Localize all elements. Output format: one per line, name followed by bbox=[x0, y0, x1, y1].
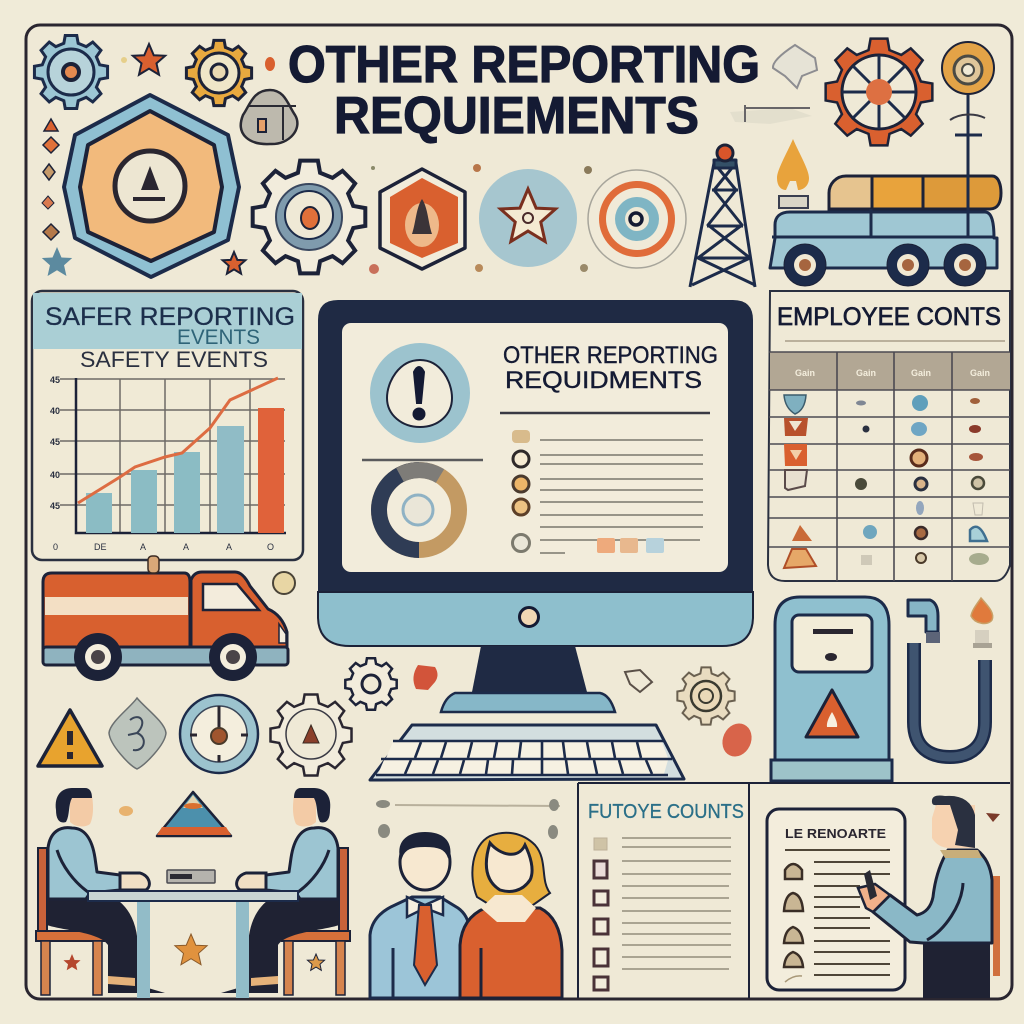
panel: safety events chart bbox=[32, 291, 303, 560]
bar chart: 45 bbox=[50, 375, 60, 385]
icon: blue tanker truck bbox=[770, 176, 1001, 286]
fuel pump bbox=[771, 597, 993, 781]
checkboxes bbox=[594, 838, 608, 990]
panel dividers bbox=[578, 783, 1010, 998]
cab bbox=[191, 572, 287, 648]
stand base bbox=[441, 693, 615, 712]
keyboard bbox=[370, 725, 684, 780]
icon: star on blue circle bbox=[479, 169, 577, 267]
chart title: SAFETY EVENTS bbox=[80, 347, 268, 372]
warning triangle bbox=[806, 690, 858, 737]
icon: yellow gear bbox=[186, 40, 252, 106]
title bbox=[288, 36, 760, 145]
icon: outline gear bbox=[270, 694, 352, 776]
monitor chin bbox=[318, 592, 753, 646]
icon: blue star bbox=[42, 247, 72, 276]
cargo box bbox=[43, 573, 190, 648]
icon: flame bbox=[777, 139, 809, 208]
bar chart: 0 bbox=[53, 542, 58, 552]
icon: blue gear bbox=[34, 35, 108, 109]
table icons bbox=[784, 395, 989, 568]
panel: employee counts table bbox=[768, 291, 1010, 581]
star bbox=[175, 934, 207, 965]
table header: Gain bbox=[911, 368, 931, 378]
cab and body bbox=[770, 212, 997, 268]
bar chart: 40 bbox=[50, 470, 60, 480]
windshield bbox=[203, 584, 259, 610]
icon: orange hexagon badge bbox=[380, 169, 465, 269]
alert icon bbox=[370, 343, 470, 443]
table grid bbox=[769, 352, 1010, 581]
connector bbox=[148, 556, 159, 573]
nozzle bbox=[908, 600, 940, 643]
pump body bbox=[775, 597, 889, 760]
icon: tan gear bbox=[677, 667, 735, 725]
screen heading: REQUIDMENTS bbox=[505, 367, 702, 394]
icon: grey badge bbox=[109, 698, 166, 769]
badge bbox=[273, 572, 295, 594]
icon: clock bbox=[180, 695, 258, 773]
bar chart: 45 bbox=[50, 501, 60, 511]
icon: padlock bbox=[241, 90, 297, 144]
screen bbox=[342, 323, 728, 572]
table title: EMPLOYEE CONTS bbox=[777, 303, 1001, 331]
icon: target bbox=[588, 170, 686, 268]
person left bbox=[36, 788, 165, 995]
bar chart bbox=[50, 375, 286, 552]
icon: pole with gauge bbox=[942, 42, 994, 238]
icon: faint shield and tool bbox=[730, 45, 817, 124]
device bbox=[167, 870, 215, 883]
chassis bbox=[43, 647, 288, 665]
donut chart bbox=[379, 470, 459, 550]
table bbox=[88, 891, 298, 998]
title: REQUIEMENTS bbox=[334, 87, 699, 145]
screen heading bbox=[503, 342, 718, 394]
table header: Gain bbox=[856, 368, 876, 378]
pump display bbox=[792, 615, 872, 672]
wheels bbox=[784, 244, 986, 286]
monitor bezel bbox=[318, 300, 753, 592]
icon: oil derrick bbox=[690, 145, 755, 287]
bar chart: 45 bbox=[50, 437, 60, 447]
heading band: SAFER REPORTING bbox=[45, 303, 295, 331]
icon: orange star bbox=[133, 44, 165, 75]
icon row: top left badges bbox=[34, 35, 297, 276]
bar chart: A bbox=[183, 542, 189, 552]
bar chart: DE bbox=[94, 542, 107, 552]
icon: sketch mark bbox=[625, 670, 652, 692]
bar chart: A bbox=[226, 542, 232, 552]
heading band: EVENTS bbox=[177, 326, 260, 349]
table header: Gain bbox=[795, 368, 815, 378]
bar chart: A bbox=[140, 542, 146, 552]
icon: floating mark bbox=[119, 806, 133, 816]
table header bbox=[770, 352, 1010, 390]
icon: orange wheel gear bbox=[826, 39, 932, 145]
table header: Gain bbox=[970, 368, 990, 378]
icon: red tag bbox=[413, 665, 438, 690]
scattered dots bbox=[121, 57, 592, 274]
panel: report document and presenter bbox=[767, 796, 1000, 998]
icon: orange drop bbox=[265, 57, 275, 71]
two employees bbox=[370, 799, 562, 998]
bar chart: O bbox=[267, 542, 274, 552]
icon: small outline gear bbox=[345, 658, 397, 710]
woman bbox=[460, 833, 562, 998]
screen heading: OTHER REPORTING bbox=[503, 342, 718, 369]
man bbox=[370, 833, 470, 998]
icon: red blob bbox=[717, 719, 757, 761]
title: OTHER REPORTING bbox=[288, 36, 760, 94]
power button bbox=[520, 608, 538, 626]
icon: warning triangle bbox=[38, 710, 102, 766]
stand bbox=[472, 646, 587, 692]
small markers bbox=[376, 799, 560, 839]
icon: small star bbox=[223, 252, 245, 274]
pump base bbox=[771, 760, 892, 781]
flame bbox=[971, 598, 993, 648]
heading band bbox=[33, 293, 302, 349]
monitor bbox=[318, 300, 753, 712]
panel: checklist bbox=[588, 801, 744, 990]
meeting scene bbox=[36, 788, 350, 998]
hose bbox=[914, 643, 985, 757]
tank bbox=[829, 176, 1001, 209]
icon row: safety symbols bbox=[38, 658, 757, 776]
small star right bbox=[307, 954, 325, 970]
report document: LE RENOARTE bbox=[785, 826, 886, 841]
icon: large hexagon badge bbox=[64, 95, 239, 277]
small star left bbox=[63, 954, 81, 970]
icon: small markers column bbox=[42, 119, 59, 240]
bar chart: 40 bbox=[50, 406, 60, 416]
headlight bbox=[279, 624, 286, 643]
report document bbox=[767, 809, 905, 990]
wheels bbox=[74, 633, 257, 681]
checklist title: FUTOYE COUNTS bbox=[588, 801, 744, 823]
person right bbox=[221, 788, 350, 995]
screen list bbox=[512, 430, 703, 553]
presenter bbox=[858, 796, 1000, 998]
icon: white gear with blue ring bbox=[253, 161, 365, 273]
red delivery truck bbox=[43, 556, 295, 681]
icon: pyramid bbox=[157, 792, 231, 836]
checklist lines bbox=[622, 838, 731, 969]
